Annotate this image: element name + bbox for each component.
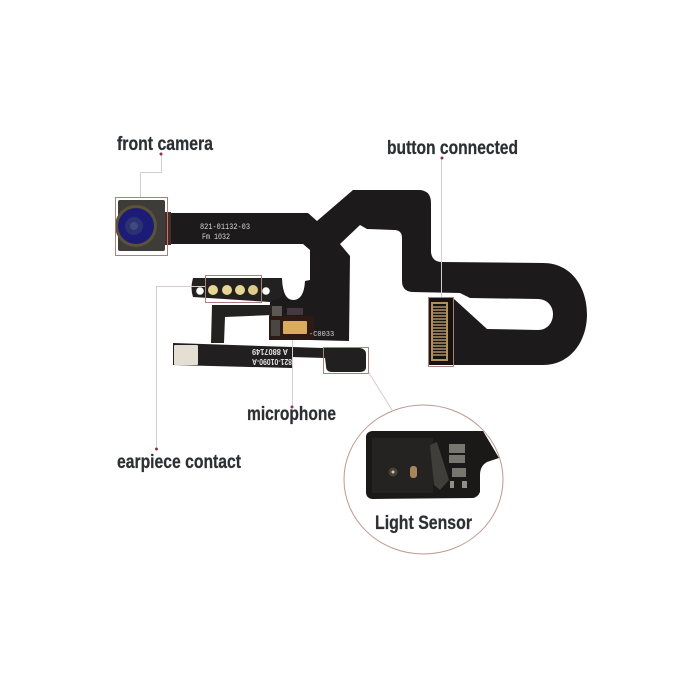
earpiece contacts bbox=[196, 285, 270, 295]
label: Light Sensor: Light Sensor bbox=[375, 513, 472, 534]
label: earpiece contact: earpiece contact bbox=[117, 452, 242, 473]
flex cable: main ribbon bbox=[170, 190, 587, 372]
label: button connected: button connected bbox=[387, 138, 518, 159]
microphone components: -C0033 bbox=[309, 331, 334, 339]
sensor components bbox=[430, 442, 467, 490]
highlight boxes bbox=[116, 198, 454, 374]
sensor apertures bbox=[388, 466, 417, 478]
sensor board photo bbox=[366, 431, 499, 499]
leader lines bbox=[140, 154, 442, 449]
sensor inner panel bbox=[372, 438, 433, 493]
microphone components bbox=[269, 306, 334, 340]
flex cable: lower strip bbox=[173, 343, 366, 372]
lower strip print: A 8807149 bbox=[252, 347, 288, 356]
label: front camera: front camera bbox=[117, 134, 213, 155]
flex cable: contact strip bbox=[192, 278, 282, 302]
part number print: Fm 1032 bbox=[202, 233, 230, 242]
label: microphone: microphone bbox=[247, 404, 336, 425]
part number print: 821-01132-03 bbox=[200, 223, 250, 232]
lower strip print bbox=[252, 347, 292, 366]
leader dots bbox=[155, 152, 444, 450]
part number print bbox=[200, 223, 250, 242]
flex cable: thin branch bbox=[211, 305, 272, 343]
connector bbox=[430, 298, 453, 365]
camera module bbox=[115, 200, 171, 251]
lower strip print: 821-01090-A bbox=[252, 357, 292, 366]
light sensor callout bbox=[344, 405, 503, 554]
silver pad bbox=[174, 345, 198, 365]
